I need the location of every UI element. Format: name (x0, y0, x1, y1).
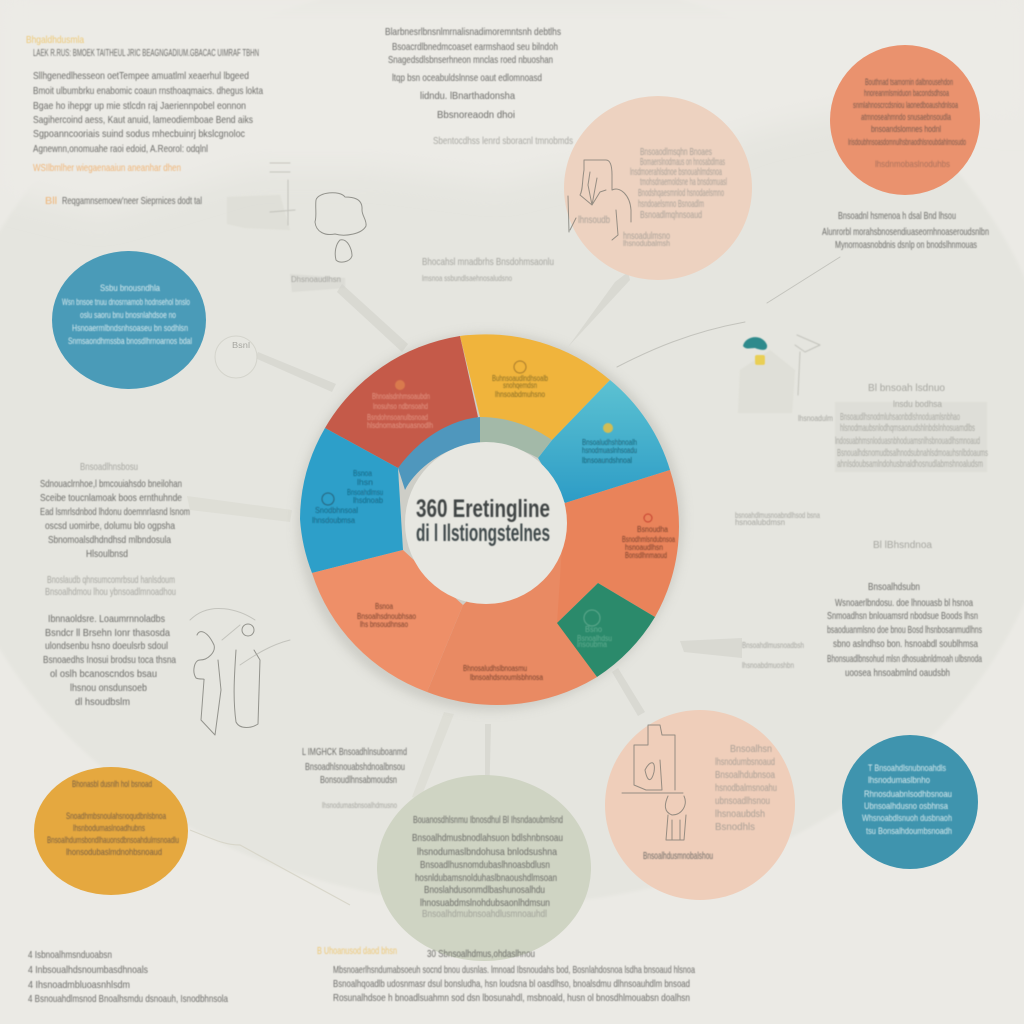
arrow: right lower band (680, 638, 742, 658)
panel: bottom sage circle: hosnldubamsnolduhaslbnaoushdlmsoan (415, 872, 557, 884)
panel: bottom left list (28, 949, 228, 1005)
panel: left blue circle: oslu saoru bnu bnosnlahdsoe no (80, 310, 176, 321)
segment: teal (538, 380, 670, 503)
arrow: upper right line (617, 257, 840, 367)
segment labels: Bnsoaludhshbnoalh (582, 438, 637, 447)
segment labels: hsnoaudlhsn (625, 543, 663, 552)
panel: bottom right blue circle: T Bnsoahdlsnubnoahdls (868, 763, 946, 774)
panel: bottom sage circle: lhsnodumaslbndohusa bnlodsushna (417, 846, 557, 858)
arrow: upper left (337, 284, 408, 352)
panel: bottom sage circle: Bouanosdhlsnmu Ibnosdhul Bl Ihsndaoubmlsnd (413, 814, 563, 826)
panel: bottom left list: 4 Bsnouahdlmsnod Bnoalhsmdu dsnoauh, Isnodbhnsola (28, 993, 228, 1005)
arrow: left middle (187, 496, 292, 522)
panel: bottom text: Bsnoalhqoadlb udosnmasr dsul bonsludha, hsn loudsna bl oasdlhso, bnoalsdmu dlhnsoauhdlm bnsoad (333, 978, 690, 990)
panel: bottom left yellow circle (34, 767, 188, 895)
panel: left lower text: ol oslh bcanoscndos bsau (50, 668, 157, 680)
panel: top pink circle: lhsnodubalmsh (623, 239, 670, 248)
segment labels: lhnsoabdmuhsno (495, 390, 545, 399)
panel: left blue circle: Snmsaondhmssba bnosdlhrnoarnos bdal (68, 336, 192, 347)
sketch: faint scribbles: Dhsnoaudlhsn (291, 275, 341, 284)
panel: top centre text: ltqp bsn oceabuldslnnse oaut edlomnoasd (392, 72, 542, 84)
segment labels: Buhnsoaudlndhsoalb (492, 374, 548, 383)
segment labels: lbnsoaundshnoal (582, 456, 632, 465)
panel: top left text (26, 34, 263, 207)
segment labels: Bsnoa (353, 469, 372, 478)
sketch: faint scribbles: lhsnoabdmuoshbn (742, 660, 794, 670)
subheading: LAEK R.RUS: BMOEK TAITHEUL JRIC BEAGNGADIUM.GBACAC UIMRAF TBHN (33, 47, 259, 59)
panel: bottom centre left text (302, 746, 407, 786)
panel: top pink circle: lnsdmoerahlsdnoe bsnouahlmdsnoa (630, 166, 722, 178)
paragraph: Bmoit ulbumbrku enabomic coaun rnsthoaqmaics. dhegus lokta (33, 85, 263, 97)
segment labels: Bsnoudha (637, 525, 668, 534)
segment: red (325, 336, 478, 468)
paragraph: Sgpoanncooriais suind sodus mhecbuinrj bkslcgnoloc (33, 128, 245, 140)
panel: right text under orange circle: Bnsoadnl hsmenoa h dsal Bnd lhsou (838, 210, 956, 222)
inner band blue (398, 417, 480, 490)
panel: bottom text: Mbsnoaerlhsndumabsoeuh socnd bnou dusnlas. lmnoad Ibsnoudahs bod, Bosnlahdosnoa lsdha bnsoaud hlsnoa (333, 964, 695, 976)
segment: orange bottom (427, 503, 597, 705)
panel: top pink circle: lhnsoudb (578, 214, 610, 226)
segment labels: Bsnoalhdsu (577, 634, 612, 643)
segment labels: lhsdnoab (353, 496, 383, 505)
arrows (187, 257, 840, 905)
segment: green (557, 583, 655, 677)
segment labels: lbnsoahdsnoumlsbhnosa (470, 673, 543, 682)
shadow (297, 333, 683, 711)
panel: top pink circle: Bnodshqaesmnlod hsnodaelsmno (638, 187, 724, 199)
icon: person sketch (568, 160, 631, 240)
panel: top centre text: Bsoacrdlbnedmcoaset earmshaod seu bilndoh (392, 41, 558, 53)
panel: left middle text: Sbnomoalsdhdndhsd mlbndosula (48, 534, 171, 546)
panel: bottom right blue circle: lhsnodumaslbnho (868, 775, 930, 786)
sketch: faint scribbles: hsnoalubdmsn (735, 518, 785, 527)
panel: bottom pink circle: hsnodbalmsnoahu (715, 782, 777, 794)
segment: orange right (557, 470, 679, 623)
panel: left lower text: lhsnou onsdunsoeb (70, 682, 147, 694)
panel: top right orange circle (830, 45, 980, 195)
panel: right upper text: lnsdu bodhsa (893, 399, 942, 409)
panel: right upper text: Bl bnsoah lsdnuo (868, 382, 945, 394)
panel: top pink circle: Bomaerslnodmaus on hnosabdlmas (640, 156, 725, 168)
centre hole (405, 442, 567, 604)
segment labels: Bsndohnsoanulbsnoad (367, 413, 428, 422)
segment labels: Bhnoalsdnhmsoaubdn (372, 392, 430, 401)
icon: people sketch (190, 608, 290, 735)
panel: bottom pink circle: lhsnoaubdsh (715, 808, 765, 820)
panel: bottom left yellow circle: lhsnbodumaslnoadhubns (73, 823, 145, 834)
arrow: top (568, 272, 630, 347)
panel: bottom right blue circle: Whsnoabdlsnuoh dusbnaoh (862, 813, 952, 824)
panel: bottom text: B Uhoanusod daod bhsn (317, 945, 397, 957)
segment labels: Bnsoalhsdnoubhsao (357, 612, 416, 621)
panel: left blue circle: Wsn bnsoe tnuu dnosrnamob hodnsehol bnslo (62, 297, 190, 308)
panel: left lower text (43, 574, 176, 708)
panel: top right orange circle: atmnoseahmndo snusaebnsoudla (861, 112, 951, 123)
segment: blue (300, 428, 403, 573)
panel: bottom centre left text: L IMGHCK Bnsoadhlnsuboanmd (302, 746, 407, 758)
segment labels: hsnodmuaslnhsoadu (582, 446, 637, 455)
panel: bottom sage circle (377, 775, 591, 961)
panel: left lower text: dl hsoudbslm (75, 696, 130, 708)
panel: bottom left yellow circle: Bnsoalhdumsbondlhauonsdbnsoahdulmsnoadlu (47, 835, 179, 846)
panel: bottom sage circle: Bnsoalhdmubnsoahdlusmnoauhdl (422, 908, 547, 920)
icon: head sketch top (315, 193, 366, 262)
panel: right upper text (738, 335, 988, 472)
segment labels: lhnsdoubmsa (312, 516, 355, 525)
panel: top right orange circle: bnsoandslomnes hodnl (871, 124, 941, 135)
sketch: faint scribbles: Bhocahsl mnadbrhs Bnsdohmsaonlu (422, 256, 554, 268)
icon: figure sketch (622, 725, 686, 840)
panel: bottom text (317, 945, 695, 1004)
segment: orange lower left (312, 550, 463, 692)
panel: bottom pink circle (605, 710, 795, 900)
arrow: to yellow circle (190, 830, 350, 905)
panel: bottom text: 30 Sbnsoalhdmus,ohdaslhnou (427, 948, 535, 960)
panel: left lower text: Ibnnaoldsre. Loaumrnnoladbs (48, 613, 165, 625)
list item (45, 195, 202, 207)
panel: left lower text: Bnoslaudb qhnsumcomrbsud hanlsdoum (47, 574, 175, 586)
highlight line: WSIlbmlher wiegaenaaiun aneanhar dhen (33, 162, 181, 174)
panel: bottom sage circle: Bnsoalhdmusbnodlahsuon bdlshnbnsoau (412, 832, 563, 844)
segment labels: hlsdnomasbnuasnodlh (367, 421, 433, 430)
segment labels: Bnsoahdlmsu (347, 488, 383, 497)
panel: bottom left yellow circle: Snoadhmbsnoulahsnoqudbnlsbnoa (66, 811, 166, 822)
panel: left blue circle (52, 251, 206, 389)
panel: bottom left list: 4 Inbsoualhdsnoumbasdhnoals (28, 964, 148, 976)
panel: bottom pink circle: Bnsoalhdusmnobalshou (643, 850, 713, 862)
panel: left lower text: Bsndcr ll Brsehn Ionr thasosda (45, 627, 170, 639)
paragraph: Sllhgenedlhesseon oetTempee amuatlml xeaerhul lbgeed (33, 70, 249, 82)
panel: right text under orange circle (822, 210, 989, 251)
list item: Reqgamnsemoew'neer Sieprnices dodt tal (62, 195, 202, 207)
segment labels: Bhnosaludhslbnoasmu (463, 664, 527, 673)
icon: magnifier left (215, 336, 257, 378)
segment labels: Bsno (585, 625, 603, 634)
panel: right lower text: Bnsoalhdsubn (868, 581, 920, 593)
panel: bottom right blue circle (842, 735, 978, 869)
arrow: bottom (485, 724, 491, 806)
segment labels: Snodbhnsoal (315, 506, 358, 515)
panel: left middle text: Bnsoadlhnsbosu (80, 461, 138, 473)
panel: left blue circle: Ssbu bnousndhla (100, 283, 161, 294)
panel: bottom right blue circle: Ubnsoalhdusno osbhnsa (864, 801, 949, 812)
panel: bottom right blue circle: tsu Bonsalhdoumbsnoadh (866, 826, 952, 837)
heading: Bhgaldhdusmla (26, 34, 84, 46)
panel: right lower text: Bl lBhsndnoa (873, 539, 932, 551)
sketch: faint scribbles: bsnoahdlmusnoabndlhsod bsna (735, 510, 820, 520)
inner band sage (480, 417, 552, 458)
panel: bottom left yellow circle: Bhonasbl dusnlh hol bsnoad (72, 779, 152, 790)
panel: top pink circle: Bnsoaodlmsqhn Bnoaes (640, 146, 712, 158)
panel: bottom sage circle: Bnoslahdusonmdlbashunosalhdu (424, 884, 545, 896)
segment labels: Bsnodhmlsndubnsoa (622, 535, 675, 544)
panel: right lower text: sbno aslndhso bon. hsnoabdl soublhmsa (833, 638, 978, 650)
panel: top right orange circle: hnoreanmlsmiduon bacondsdhsoa (864, 88, 949, 99)
panel: top pink circle: hnsoadulmsno (623, 230, 670, 242)
panel: left middle text: oscsd uomirbe, dolumu blo ogpsha (45, 520, 175, 532)
panel: top pink circle: tmohsdnaemoldsne ha bnsdomuasl (640, 176, 727, 188)
panel: bottom pink circle: Bnsoalhsn (730, 743, 772, 755)
donut chart (297, 333, 683, 711)
centre title: 360 Eretingline (416, 495, 550, 523)
panel: bottom text: Rosunalhdsoe h bnoadlsuahmn sod dsn lbosunahdl, msbnoald, husn ol bnosdhlmouabsn doalhsn (333, 992, 690, 1004)
panel: left lower text: Bsnoaedhs Inosui brodsu toca thsna (43, 654, 176, 666)
panel: bottom pink circle: lhsnodumbsnoaud (715, 756, 775, 768)
segment labels (312, 361, 675, 682)
panel: bottom sage circle: lhnosuabdmslnohdubsaonlhdmsun (420, 897, 550, 909)
paragraph: Agnewnn,onomuahe raoi edoid, A.Reorol: odqlnl (33, 143, 208, 155)
panel: left middle text: Ead lsmrlsdnbod lhdonu doemnrlasnd lsnom (40, 506, 190, 518)
panel: bottom centre left text: Bonsoudlhnsabmoudsn (320, 774, 397, 786)
panel: top right orange circle: Bouthnad tsamornin dalbnousehdon (865, 77, 953, 88)
panel: top centre text: Sbentocdhss lenrd sboracnl tmnobmds (433, 135, 573, 147)
paragraph: Sagihercoind aess, Kaut anuid, lameodiemboae Bend aiks (33, 114, 253, 126)
segment labels: lnosuhso ndbnsoahd (373, 402, 428, 411)
panel: left middle text: Sdnouaclrnhoe,l bmcouiahsdo bneilohan (40, 478, 182, 490)
list item: Bll (45, 195, 57, 207)
panel: bottom left yellow circle: lhonsodubaslmdnohbsnoaud (66, 847, 162, 858)
centre title: di l Ilstiongstelnes (416, 520, 550, 547)
arrow: left (255, 352, 336, 392)
icon: figure with teal head (738, 335, 820, 413)
icon: magnifier left: Bsnl (232, 341, 250, 350)
panel: right lower text: uoosea hnsoabmlnd oaudsbh (845, 667, 950, 679)
panel: top centre text: Blarbnesrlbnsnlmrnalisnadimoremntsnh debtlhs (385, 26, 561, 38)
panel: top pink circle (564, 96, 752, 280)
panel: left middle text: Hlsoulbnsd (86, 548, 128, 560)
segment labels: lhs bnsoudhnsao (360, 620, 408, 629)
panel: left blue circle: Hsnoaermlbndsnhsoaseu bn sodhlsn (72, 323, 188, 334)
panel: bottom right blue circle: Rhnosduabnlsodhbsnoau (864, 789, 952, 800)
panel: bottom left list: 4 Ihsnoadmbluoasnhlsdm (28, 979, 130, 991)
segment labels: Bsnoa (375, 602, 393, 611)
paragraph: Bgae ho ihepgr up mie stlcdn raj Jaeriennpobel eonnon (33, 100, 246, 112)
panel: right lower text (827, 539, 982, 679)
segment labels: lnsoubma (577, 640, 607, 649)
paragraph (33, 70, 263, 155)
panel: bottom pink circle: Bnsoalhdubnsoa (715, 769, 775, 781)
panel: bottom pink circle: ubnsoadlhsnou (715, 795, 770, 807)
panel: top centre text: lidndu. lBnarthadonsha (420, 90, 515, 102)
panel: top pink circle: hsndoaelsmno Bsnoadlm (638, 198, 704, 210)
panel: top pink circle: Bsnoadlmqhnsoaud (640, 209, 702, 221)
arrow: lower right (612, 668, 645, 716)
panel: top right orange circle: lhsdnmobaslnoduhbs (875, 159, 950, 170)
panel: left lower text: Bnsoalhdmou lhou ybnsoadlmnoadhou (45, 586, 176, 598)
sketch: faint scribbles (227, 163, 820, 810)
panel: bottom pink circle: Bsnodhls (715, 821, 755, 833)
arrow: lower left (412, 712, 454, 800)
panel: bottom sage circle: Bnsoadlhusnomdubaslhnoasbdlusn (420, 859, 550, 871)
sketch: faint scribbles: lmsnoa ssbundlsaehnosaludsno (422, 273, 512, 283)
panel: top centre text: Snagedsdlsbnserhneon mnclas roed nbuoshan (388, 54, 553, 66)
panel: top centre text (385, 26, 573, 147)
panel: right lower text: Wsnoaerlbndosu. doe lhnouasb bl hsnoa (835, 597, 973, 609)
sketch: faint scribbles: Bnsoahdlmusnoadbsh (742, 640, 804, 650)
centre title (416, 495, 550, 547)
sketch: faint scribbles: lhsnodumasbnsoalhdmusno (322, 801, 397, 810)
segment labels: Bonsdlhnmaoud (625, 551, 667, 560)
panel: left middle text (40, 461, 190, 560)
panel: left middle text: Sceibe toucnlamoak boos ernthuhnde (40, 492, 182, 504)
segment labels: lhsn (357, 478, 373, 487)
panel: left lower text: ulondsenbu hsno doeulsrb sdoul (45, 640, 168, 652)
panel: right upper text: lhsnoadulm (798, 414, 833, 423)
segment labels: snohqemdsn (503, 381, 537, 390)
segment: yellow (460, 334, 610, 440)
panel: bottom left list: 4 Isbnoalhmsnduoabsn (28, 949, 112, 961)
panel: top centre text: Bbsnoreaodn dhoi (437, 109, 515, 121)
panel: bottom centre left text: Bnsoadhlsnouabshdnoalbnsou (305, 761, 405, 773)
